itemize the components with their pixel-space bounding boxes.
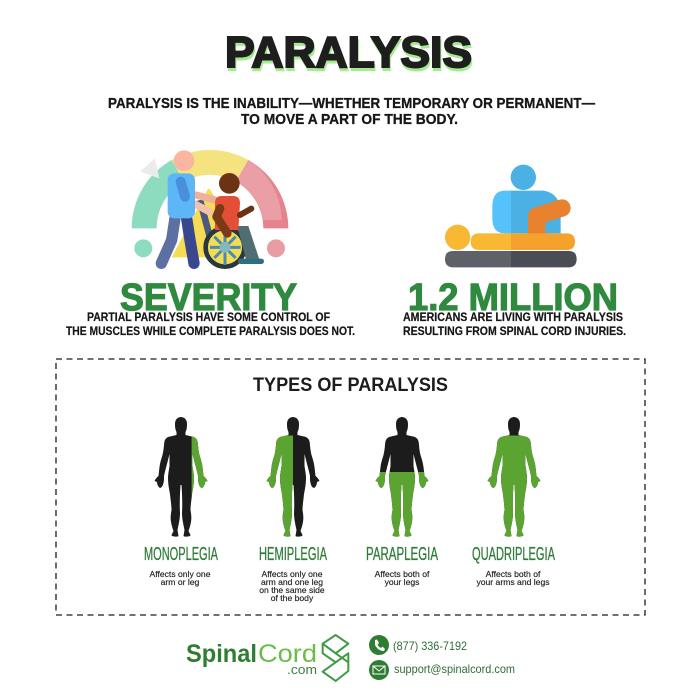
heading: severity: SEVERITY	[120, 277, 297, 319]
text: severity description: PARTIAL PARALYSIS HAVE SOME CONTROL OF	[87, 312, 330, 324]
contact: phone	[369, 635, 467, 655]
text: monoplegia description	[150, 569, 211, 587]
label: hemiplegia: HEMIPLEGIA	[259, 544, 327, 564]
contact: phone: (877) 336-7192	[393, 639, 467, 653]
logo: spinalcord.com: Cord	[258, 640, 317, 668]
text: quadriplegia description	[476, 569, 550, 587]
text: monoplegia description: arm or leg	[161, 577, 200, 587]
contact: email: support@spinalcord.com	[394, 662, 515, 676]
intro text: PARALYSIS IS THE INABILITY—WHETHER TEMPORARY OR PERMANENT—	[108, 96, 595, 112]
text: paraplegia description: Affects both of	[375, 569, 430, 579]
text: paraplegia description: your legs	[385, 577, 419, 587]
icon: therapist treating a patient	[445, 165, 577, 267]
text: severity description: THE MUSCLES WHILE COMPLETE PARALYSIS DOES NOT.	[66, 326, 355, 338]
panel: types of paralysis	[56, 359, 645, 615]
logo: spinalcord.com: Spinal	[186, 640, 257, 668]
label: quadriplegia: QUADRIPLEGIA	[472, 544, 555, 564]
text: monoplegia description: Affects only one	[150, 569, 211, 579]
text: paraplegia description	[375, 569, 430, 587]
heading: types of paralysis: TYPES OF PARALYSIS	[253, 374, 448, 396]
text: hemiplegia description: of the body	[271, 593, 314, 603]
label: paraplegia: PARAPLEGIA	[366, 544, 438, 564]
intro text: TO MOVE A PART OF THE BODY.	[241, 112, 458, 128]
text: hemiplegia description: arm and one leg	[261, 577, 323, 587]
icon: wheelchair and severity gauge	[132, 150, 288, 267]
contact: email	[369, 660, 515, 680]
text: quadriplegia description: your arms and legs	[476, 577, 550, 587]
figure: paraplegia body	[376, 417, 428, 537]
text: hemiplegia description: Affects only one	[262, 569, 323, 579]
text: americans description	[403, 312, 626, 338]
figure: hemiplegia body	[266, 417, 320, 537]
title: PARALYSIS	[226, 31, 473, 80]
text: severity description	[66, 312, 355, 338]
logo: spinalcord.com: .com	[287, 662, 317, 677]
intro text	[108, 96, 595, 128]
text: hemiplegia description	[259, 569, 325, 603]
text: hemiplegia description: on the same side	[259, 585, 325, 595]
label: monoplegia: MONOPLEGIA	[144, 544, 218, 564]
title: PARALYSIS	[225, 28, 472, 77]
heading: 1.2 million: 1.2 MILLION	[408, 277, 618, 319]
text: americans description: AMERICANS ARE LIVING WITH PARALYSIS	[403, 312, 623, 324]
figure: quadriplegia body	[488, 417, 540, 537]
text: quadriplegia description: Affects both of	[486, 569, 541, 579]
text: americans description: RESULTING FROM SPINAL CORD INJURIES.	[403, 326, 626, 338]
icon: hexagon logo mark	[323, 635, 348, 681]
logo: spinalcord.com	[186, 635, 348, 681]
figure: monoplegia body	[154, 417, 208, 537]
